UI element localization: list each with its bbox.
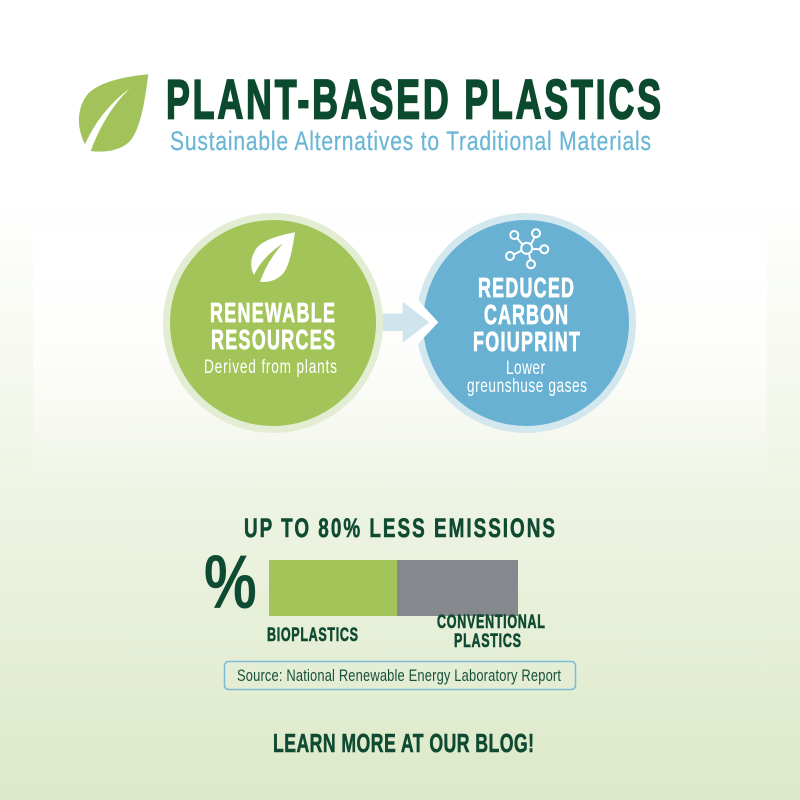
text: lower greenhouse gases: greunshuse gases [467, 375, 587, 397]
text: derived from plants: Derived from plants [204, 356, 337, 378]
label: bioplastics: BIOPLASTICS [267, 624, 358, 646]
arrow [383, 299, 438, 345]
label: conventional plastics: CONVENTIONAL [437, 611, 545, 633]
heading: reduced carbon footprint: CARBON [484, 299, 568, 330]
bar chart [267, 560, 545, 652]
heading: reduced carbon footprint: REDUCED [478, 272, 574, 303]
subtitle: Sustainable Alternatives to Traditional Materials [170, 127, 651, 157]
heading: reduced carbon footprint: FOIUPRINT [473, 326, 580, 357]
call to action: LEARN MORE AT OUR BLOG! [273, 729, 534, 758]
source callout [224, 662, 576, 690]
header leaf icon [79, 74, 148, 152]
heading: reduced carbon footprint [473, 272, 580, 357]
icon: white leaf [251, 232, 295, 282]
panel: renewable resources [163, 213, 383, 433]
panel: reduced carbon footprint [416, 213, 636, 433]
icon: percent sign: % [204, 540, 257, 625]
title: PLANT-BASED PLASTICS [166, 67, 661, 130]
text: lower greenhouse gases [467, 357, 587, 397]
heading: renewable resources: RENEWABLE [210, 297, 335, 328]
heading: renewable resources [210, 297, 335, 355]
text: lower greenhouse gases: Lower [506, 357, 545, 379]
icon: molecule [506, 229, 548, 268]
source callout: Source: National Renewable Energy Laboratory Report [237, 666, 562, 686]
heading: renewable resources: RESOURCES [211, 324, 335, 355]
label: conventional plastics [437, 611, 545, 652]
label: conventional plastics: PLASTICS [454, 630, 521, 652]
heading: emissions: UP TO 80% LESS EMISSIONS [244, 513, 555, 543]
